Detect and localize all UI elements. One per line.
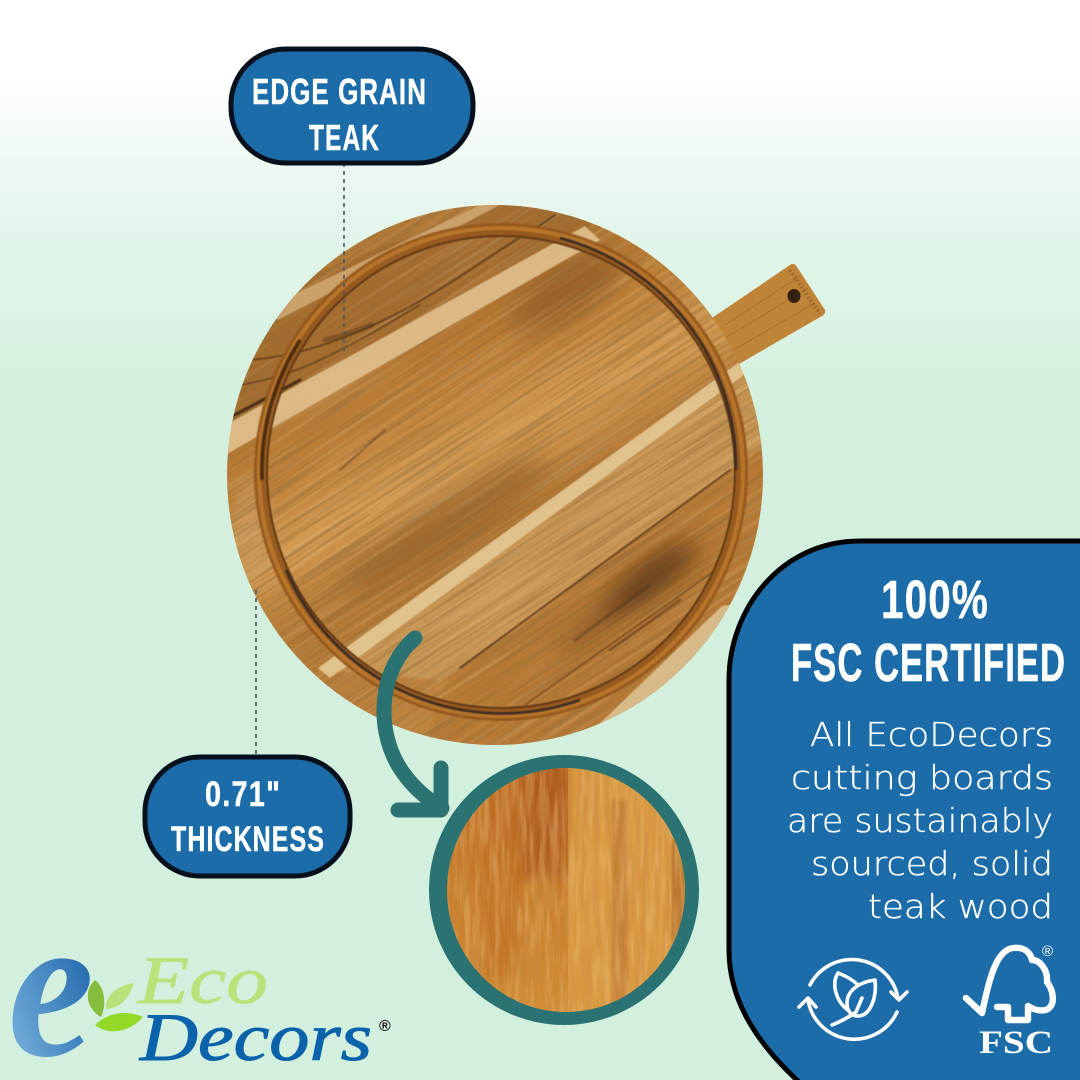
panel body text: cutting boards [791, 758, 1053, 797]
light grain texture [228, 206, 762, 745]
dashed leader: thickness [255, 590, 257, 757]
wood grain texture [227, 205, 763, 745]
routed juice groove [259, 228, 743, 716]
icon: FSC logo [966, 943, 1053, 1061]
round board body [227, 205, 763, 745]
darker patch near top of middle section [507, 248, 622, 340]
dark seam lines [229, 215, 730, 705]
panel body text: All EcoDecors [810, 715, 1053, 754]
lower section [434, 446, 762, 742]
callout: edge grain teak [231, 49, 473, 163]
dark blot [548, 530, 705, 663]
panel: FSC certified [729, 541, 1080, 1080]
panel heading: 100% [881, 570, 989, 630]
callout: thickness: 0.71" [205, 775, 281, 814]
light lower band [338, 374, 762, 680]
registered mark: ® [379, 1018, 391, 1035]
logo leaves [88, 980, 143, 1031]
pale sapwood stripes [228, 205, 744, 724]
logo word Decors: Decors [139, 999, 372, 1075]
darker upper-left wood section [233, 206, 590, 420]
dashed leader: edge grain [343, 163, 345, 353]
callout: thickness: THICKNESS [171, 820, 325, 859]
logo word Eco: Eco [137, 942, 268, 1018]
callout: edge grain teak: EDGE GRAIN [252, 71, 427, 112]
panel body text [787, 715, 1053, 926]
panel body text: teak wood [868, 887, 1053, 926]
board handle [700, 264, 825, 368]
curved arrow to close-up [384, 638, 442, 810]
logo: EcoDecors [8, 873, 391, 1080]
icon: FSC logo: ® [1042, 943, 1053, 960]
icon: recycling leaf [799, 960, 907, 1039]
darker grain band [340, 452, 548, 596]
panel heading [791, 570, 1066, 693]
left rim light patch [232, 480, 272, 580]
cutting board photo [227, 205, 826, 745]
callout: thickness [145, 757, 350, 876]
panel body text: are sustainably [787, 801, 1053, 840]
callout: edge grain teak: TEAK [309, 117, 380, 158]
icon: FSC logo: FSC [979, 1025, 1053, 1061]
wood close-up circle [429, 750, 700, 1030]
panel body text: sourced, solid [811, 844, 1053, 883]
